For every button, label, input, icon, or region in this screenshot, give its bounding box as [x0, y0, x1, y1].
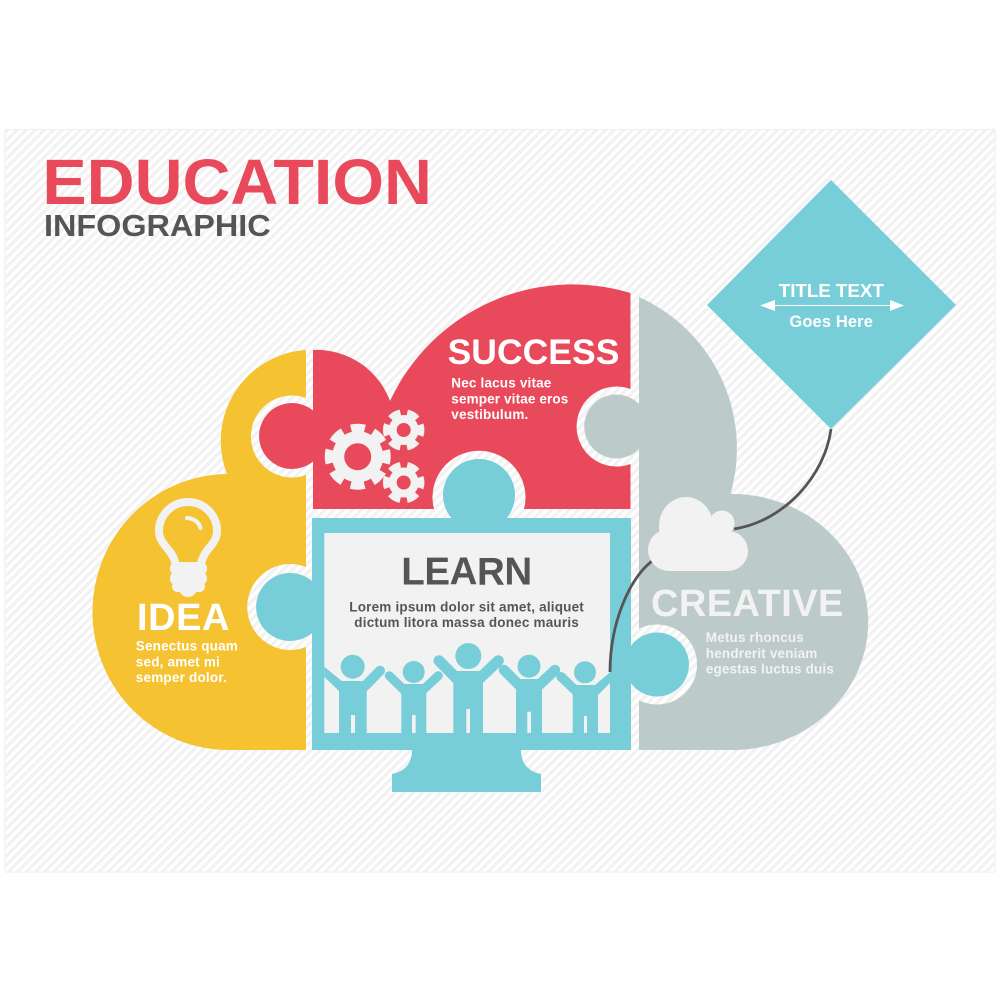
heading: success: SUCCESS — [448, 332, 619, 372]
connector: diamond to cloud — [734, 429, 831, 529]
text block: learn: dictum litora massa donec mauris — [354, 615, 579, 630]
callout: title diamond: TITLE TEXT — [779, 280, 884, 301]
title: INFOGRAPHIC — [44, 208, 271, 243]
panel: creative puzzle piece — [584, 297, 868, 750]
text block: success: vestibulum. — [451, 407, 528, 422]
text block: success: Nec lacus vitae — [451, 376, 552, 390]
callout: title diamond: Goes Here — [789, 313, 873, 331]
icon: gears — [329, 412, 421, 500]
person 1 — [324, 655, 380, 733]
heading: learn: LEARN — [401, 550, 532, 594]
panel: idea puzzle piece — [92, 350, 306, 750]
connector: cloud to monitor — [610, 561, 652, 672]
screen — [324, 533, 610, 733]
background panel — [5, 130, 995, 872]
callout: title diamond — [707, 180, 956, 429]
text block: idea — [136, 638, 238, 685]
text block: learn — [349, 600, 584, 630]
person 4 — [504, 655, 555, 733]
text block: success — [451, 376, 568, 422]
text block: creative — [706, 630, 834, 676]
panel: learn puzzle piece monitor — [256, 459, 689, 792]
monitor frame and stand — [256, 459, 689, 792]
icon: group of people — [324, 643, 610, 733]
person 2 — [389, 661, 438, 733]
text block: creative: egestas luctus duis — [706, 662, 834, 676]
text block: creative: Metus rhoncus — [706, 630, 804, 645]
title: EDUCATION — [42, 146, 432, 218]
text block: learn: Lorem ipsum dolor sit amet, aliquet — [349, 600, 584, 614]
person 3 — [439, 643, 498, 733]
panel: success puzzle piece — [259, 284, 630, 509]
arrow: double headed — [760, 300, 904, 311]
text block: success: semper vitae eros — [451, 392, 568, 406]
person 5 — [561, 661, 610, 733]
text block: creative: hendrerit veniam — [706, 646, 817, 661]
icon: light bulb — [159, 502, 217, 597]
text block: idea: Senectus quam — [136, 638, 238, 654]
icon: cloud — [648, 497, 748, 571]
heading: idea: IDEA — [137, 597, 230, 639]
text block: idea: sed, amet mi — [136, 654, 220, 670]
text block: idea: semper dolor. — [136, 670, 227, 685]
heading: creative: CREATIVE — [651, 583, 843, 625]
